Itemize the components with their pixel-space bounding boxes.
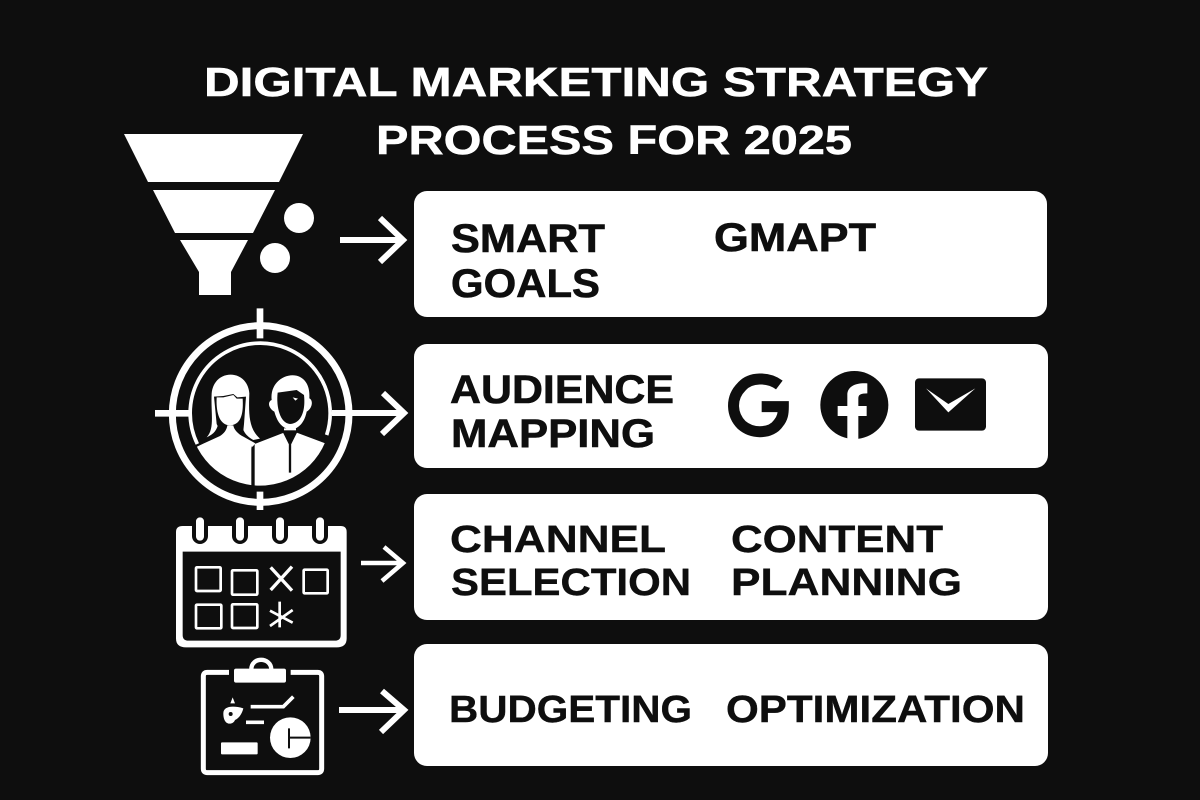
- arrow: row 3: [361, 547, 403, 581]
- icon: google: [734, 379, 783, 432]
- arrow: row 1: [340, 218, 403, 262]
- icon: mail: [915, 378, 986, 431]
- text: audience mapping: AUDIENCE: [450, 368, 674, 412]
- text: audience mapping: MAPPING: [451, 412, 655, 456]
- text: channel selection: [450, 519, 962, 604]
- text: smart goals: GOALS: [451, 262, 600, 306]
- text: budgeting optimization: [449, 689, 1025, 731]
- text: smart goals: [451, 216, 876, 306]
- text: channel selection: CONTENT: [731, 519, 943, 561]
- text: budgeting optimization: OPTIMIZATION: [726, 689, 1025, 731]
- icon: man: [253, 375, 325, 490]
- title: [204, 59, 988, 163]
- text: smart goals: GMAPT: [714, 216, 876, 260]
- text: audience mapping: [450, 368, 674, 456]
- text: budgeting optimization: BUDGETING: [449, 689, 692, 731]
- text: channel selection: SELECTION: [451, 562, 691, 604]
- icon: audience target: [155, 308, 349, 513]
- icon: woman: [196, 374, 260, 486]
- icon: funnel: [124, 134, 314, 295]
- arrow: row 4: [339, 691, 404, 732]
- text: channel selection: PLANNING: [731, 562, 962, 604]
- icon: budget clipboard: [203, 660, 322, 773]
- panel: budgeting optimization: [414, 644, 1048, 766]
- panel: channel selection: [414, 494, 1048, 620]
- text: channel selection: CHANNEL: [450, 519, 666, 561]
- icon: facebook: [820, 371, 888, 440]
- panel: smart goals: [414, 191, 1047, 317]
- panel: audience mapping: [414, 344, 1048, 468]
- icon: calendar: [176, 510, 347, 647]
- arrow: row 2: [332, 393, 404, 434]
- title: DIGITAL MARKETING STRATEGY: [204, 59, 988, 105]
- title: PROCESS FOR 2025: [376, 117, 852, 163]
- text: smart goals: SMART: [451, 217, 605, 261]
